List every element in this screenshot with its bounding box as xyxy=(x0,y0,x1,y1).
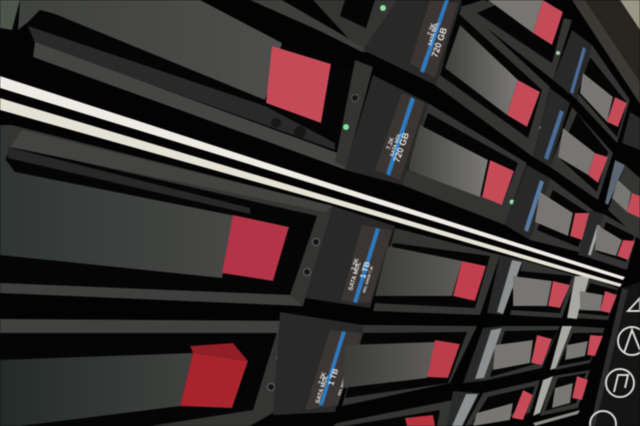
label panel: row C 1 TB: 1 TB xyxy=(358,260,372,280)
drive: row D column 3 xyxy=(463,326,560,383)
drive: row B column 3 xyxy=(505,165,597,253)
label panel: row D 1 TB: 1 TB xyxy=(326,367,340,387)
drive: row D big xyxy=(0,319,298,426)
label panel: row D 1 TB: SATA MDL xyxy=(315,374,330,405)
drive: row A column 2 xyxy=(435,5,550,157)
label panel: row B 720 GB xyxy=(345,75,428,185)
drive: row B column 4 xyxy=(578,210,637,270)
icon: warning triangle xyxy=(628,298,640,311)
drive: row A left with LED xyxy=(0,0,397,52)
drive: row E column 2 xyxy=(333,400,453,426)
drive: row C column 2 xyxy=(373,228,500,315)
label panel: row A 720 GB: SATA MDL xyxy=(427,21,441,47)
label panel: row C 1 TB: SATA MDL xyxy=(348,261,363,292)
icon: circle manual xyxy=(606,369,634,397)
label panel: row B 720 GB: 7.2K xyxy=(386,136,396,151)
drive: row E column 4 xyxy=(533,370,590,426)
drive: row C big xyxy=(0,125,333,306)
label panel: row D 1 TB xyxy=(273,312,363,415)
drive: row B big xyxy=(18,0,373,170)
label panel: row D 1 TB: MDL 500GB 7.2K xyxy=(337,368,350,396)
drive: row D column 2 xyxy=(342,325,477,406)
label panel: row C 1 TB: 7.2K xyxy=(351,257,361,272)
label panel: row A 720 GB xyxy=(363,0,462,85)
right safety panel with icons xyxy=(590,282,640,426)
drive: top row column 3 xyxy=(460,0,572,80)
drive: top row column 4 xyxy=(553,30,640,150)
icon: circle bottom xyxy=(590,411,616,426)
drive: row B column 2 xyxy=(402,103,527,225)
drive: row A column 3 xyxy=(533,88,640,240)
label panel: row C 1 TB xyxy=(305,206,395,308)
label panel: row D 1 TB: 7.2K xyxy=(318,371,328,386)
label panel: row B 720 GB: SATA MDL xyxy=(389,132,403,158)
rack edge top right xyxy=(572,0,640,104)
white rail bars xyxy=(0,76,625,287)
drive: row C column 3 xyxy=(487,255,577,318)
label panel: row C 1 TB: MDL 500GB 7.2K xyxy=(362,265,374,293)
drive: row C column 4 xyxy=(567,276,618,320)
label panel: row A 720 GB: 7.2K xyxy=(427,22,437,37)
icon: circle warning xyxy=(618,327,640,355)
drive: row E column 3 xyxy=(447,380,540,426)
drive: row D column 4 xyxy=(550,326,605,370)
label panel: row B 720 GB: 720 GB xyxy=(391,131,411,164)
label panel: row A 720 GB: 720 GB xyxy=(429,26,449,59)
